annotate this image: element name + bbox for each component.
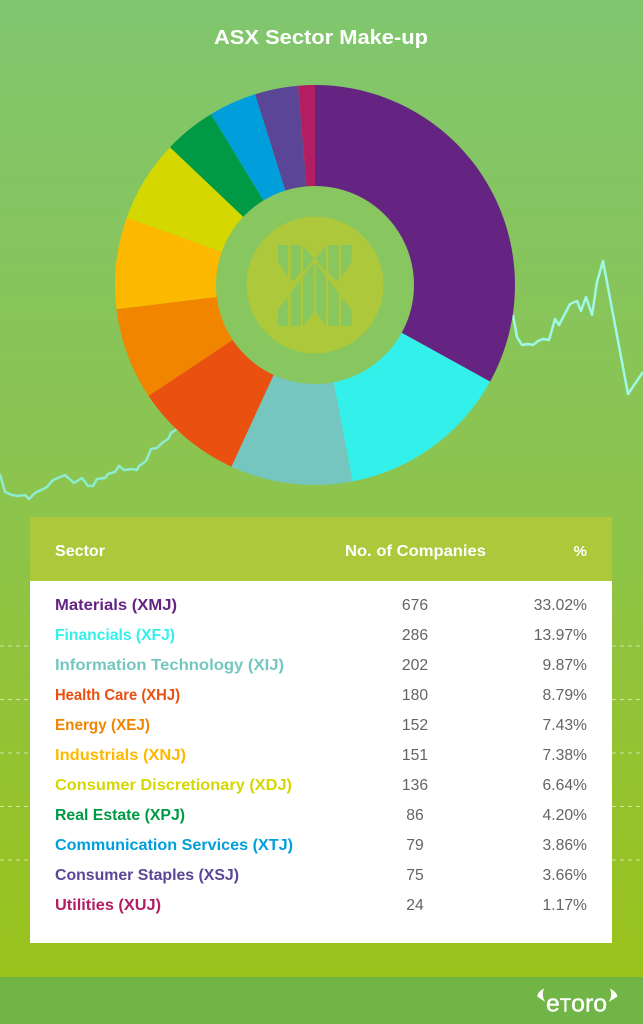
row: Real Estate: 4.20% bbox=[543, 807, 587, 824]
row: Utilities: 24 bbox=[406, 897, 424, 914]
row: Health Care bbox=[55, 687, 587, 704]
row: Information Technology: 202 bbox=[402, 657, 428, 674]
table panel bbox=[30, 517, 612, 943]
row: Energy: Energy (XEJ) bbox=[55, 717, 150, 734]
row: Energy bbox=[55, 717, 587, 734]
slice: Industrials bbox=[115, 218, 315, 309]
row: Utilities: Utilities (XUJ) bbox=[55, 897, 161, 914]
row: Industrials: 151 bbox=[402, 747, 428, 764]
row: Consumer Discretionary: 6.64% bbox=[543, 777, 587, 794]
row: Consumer Staples bbox=[55, 867, 587, 884]
donut hole bbox=[216, 186, 414, 384]
slice: Utilities bbox=[298, 85, 315, 285]
row: Real Estate: 86 bbox=[406, 807, 424, 824]
row: Industrials: 7.38% bbox=[543, 747, 587, 764]
slice: Communication Services bbox=[211, 94, 315, 285]
row: Energy: 7.43% bbox=[543, 717, 587, 734]
line chart: background price line bbox=[0, 261, 643, 499]
slice: Consumer Discretionary bbox=[127, 147, 315, 285]
slice: Energy bbox=[116, 285, 315, 396]
row: Information Technology: Information Technology (XIJ) bbox=[55, 657, 284, 674]
slice: Information Technology bbox=[231, 285, 353, 485]
table header bbox=[30, 517, 612, 581]
row: Materials bbox=[55, 597, 587, 614]
logo: eToro: eToro bbox=[546, 990, 607, 1018]
row: Health Care: 180 bbox=[402, 687, 428, 704]
row: Consumer Discretionary bbox=[55, 777, 587, 794]
row: Industrials: Industrials (XNJ) bbox=[55, 747, 186, 764]
slice: Materials bbox=[315, 85, 515, 382]
row: Communication Services: 3.86% bbox=[543, 837, 587, 854]
row: Consumer Staples: 75 bbox=[406, 867, 424, 884]
row: Consumer Discretionary: 136 bbox=[402, 777, 428, 794]
row: Health Care: Health Care (XHJ) bbox=[55, 687, 180, 704]
row: Real Estate bbox=[55, 807, 587, 824]
table header: No. of Companies bbox=[345, 543, 486, 560]
row: Communication Services: Communication Services (XTJ) bbox=[55, 837, 293, 854]
row: Energy: 152 bbox=[402, 717, 428, 734]
donut chart bbox=[115, 85, 515, 485]
title: ASX Sector Make-up bbox=[214, 26, 428, 49]
row: Industrials bbox=[55, 747, 587, 764]
row: Financials: 13.97% bbox=[534, 627, 587, 644]
slice: Health Care bbox=[148, 285, 315, 467]
slice: Consumer Staples bbox=[255, 86, 315, 285]
row: Information Technology: 9.87% bbox=[543, 657, 587, 674]
row: Financials bbox=[55, 627, 587, 644]
icon: bull horns bbox=[537, 989, 617, 1002]
table header: % bbox=[574, 543, 587, 560]
row: Utilities bbox=[55, 897, 587, 914]
row: Real Estate: Real Estate (XPJ) bbox=[55, 807, 185, 824]
row: Consumer Discretionary: Consumer Discretionary (XDJ) bbox=[55, 777, 292, 794]
table header: Sector bbox=[55, 543, 105, 560]
row: Financials: Financials (XFJ) bbox=[55, 627, 175, 644]
row: Materials: 33.02% bbox=[534, 597, 587, 614]
row: Materials: 676 bbox=[402, 597, 428, 614]
row: Consumer Staples: 3.66% bbox=[543, 867, 587, 884]
row: Materials: Materials (XMJ) bbox=[55, 597, 177, 614]
row: Communication Services: 79 bbox=[406, 837, 424, 854]
row: Consumer Staples: Consumer Staples (XSJ) bbox=[55, 867, 239, 884]
centre disc bbox=[246, 216, 384, 354]
slice: Financials bbox=[315, 285, 490, 481]
row: Communication Services bbox=[55, 837, 587, 854]
row: Information Technology bbox=[55, 657, 587, 674]
row: Utilities: 1.17% bbox=[543, 897, 587, 914]
slice: Real Estate bbox=[170, 114, 315, 285]
row: Financials: 286 bbox=[402, 627, 428, 644]
icon: ASX X logo bbox=[278, 245, 352, 326]
footer band bbox=[0, 977, 643, 1024]
row: Health Care: 8.79% bbox=[543, 687, 587, 704]
